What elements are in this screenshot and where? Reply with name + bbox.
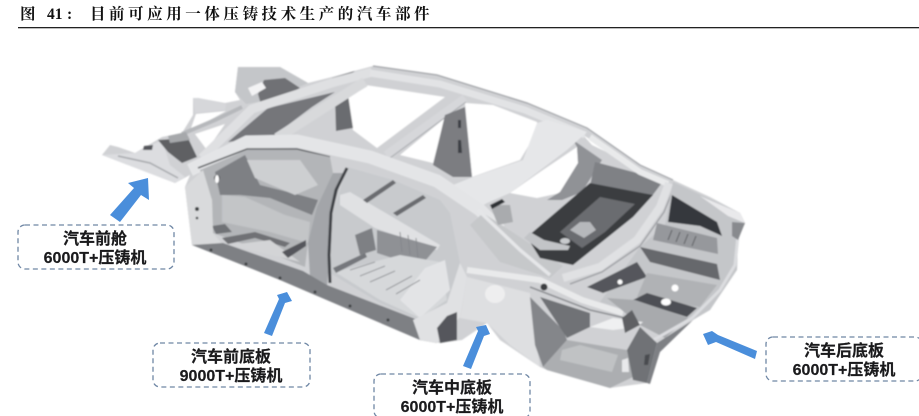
cowl dark inner [228, 92, 335, 142]
arrow: front floor [264, 292, 292, 336]
roof structure bands [202, 72, 372, 158]
arrow: middle floor [463, 325, 490, 369]
rear cabin opening [330, 167, 460, 320]
label box: front cabin: 汽车前舱 [63, 229, 127, 248]
label box: front floor: 汽车前底板 [191, 347, 271, 366]
roof cross bar [386, 98, 465, 155]
arrow: front cabin [110, 178, 149, 222]
label box: rear floor [766, 337, 919, 381]
label box: middle floor: 汽车中底板 [412, 378, 492, 397]
luggage tray [527, 183, 653, 265]
roof rail band over cabin [190, 141, 500, 230]
C pillar arc [563, 183, 669, 278]
label box: rear floor: 汽车后底板 [804, 341, 884, 360]
rear quarter [600, 182, 745, 322]
rear wheel arch [530, 297, 567, 367]
rear side light panel [453, 120, 587, 207]
arrow: rear floor [703, 331, 757, 359]
label box: front cabin [18, 225, 174, 269]
sill holes [195, 175, 426, 332]
B pillar upper [433, 107, 472, 177]
white flap [590, 318, 643, 330]
shock tower and cowl [235, 67, 308, 104]
floor rib lines [350, 232, 420, 294]
sill [192, 243, 437, 343]
dash hole [215, 175, 219, 183]
B pillar lower [308, 173, 343, 287]
title: 图 [20, 5, 36, 23]
title: 41 [47, 6, 62, 23]
label box: front cabin: 6000T+压铸机 [44, 249, 146, 267]
rear corner box [543, 340, 633, 388]
diagonal rail [478, 210, 550, 275]
label box: front floor [153, 343, 310, 387]
openings [190, 85, 623, 198]
rear bumper edge [650, 235, 738, 342]
front rail [102, 140, 185, 183]
front wheel arch area [413, 263, 467, 343]
label box: rear floor: 6000T+压铸机 [793, 361, 895, 379]
car body-in-white illustration [102, 66, 745, 388]
label box: middle floor [374, 374, 530, 416]
title: 目前可应用一体压铸技术生产的汽车部件 [90, 4, 433, 23]
label box: middle floor: 6000T+压铸机 [401, 398, 503, 416]
C pillar inner [547, 140, 602, 200]
title: : [67, 6, 72, 23]
front cabin opening [200, 150, 333, 267]
body silhouette [102, 66, 745, 388]
deck panel [470, 213, 563, 278]
title rule [18, 27, 919, 28]
label box: front floor: 9000T+压铸机 [180, 367, 282, 385]
hinge post [185, 170, 223, 245]
